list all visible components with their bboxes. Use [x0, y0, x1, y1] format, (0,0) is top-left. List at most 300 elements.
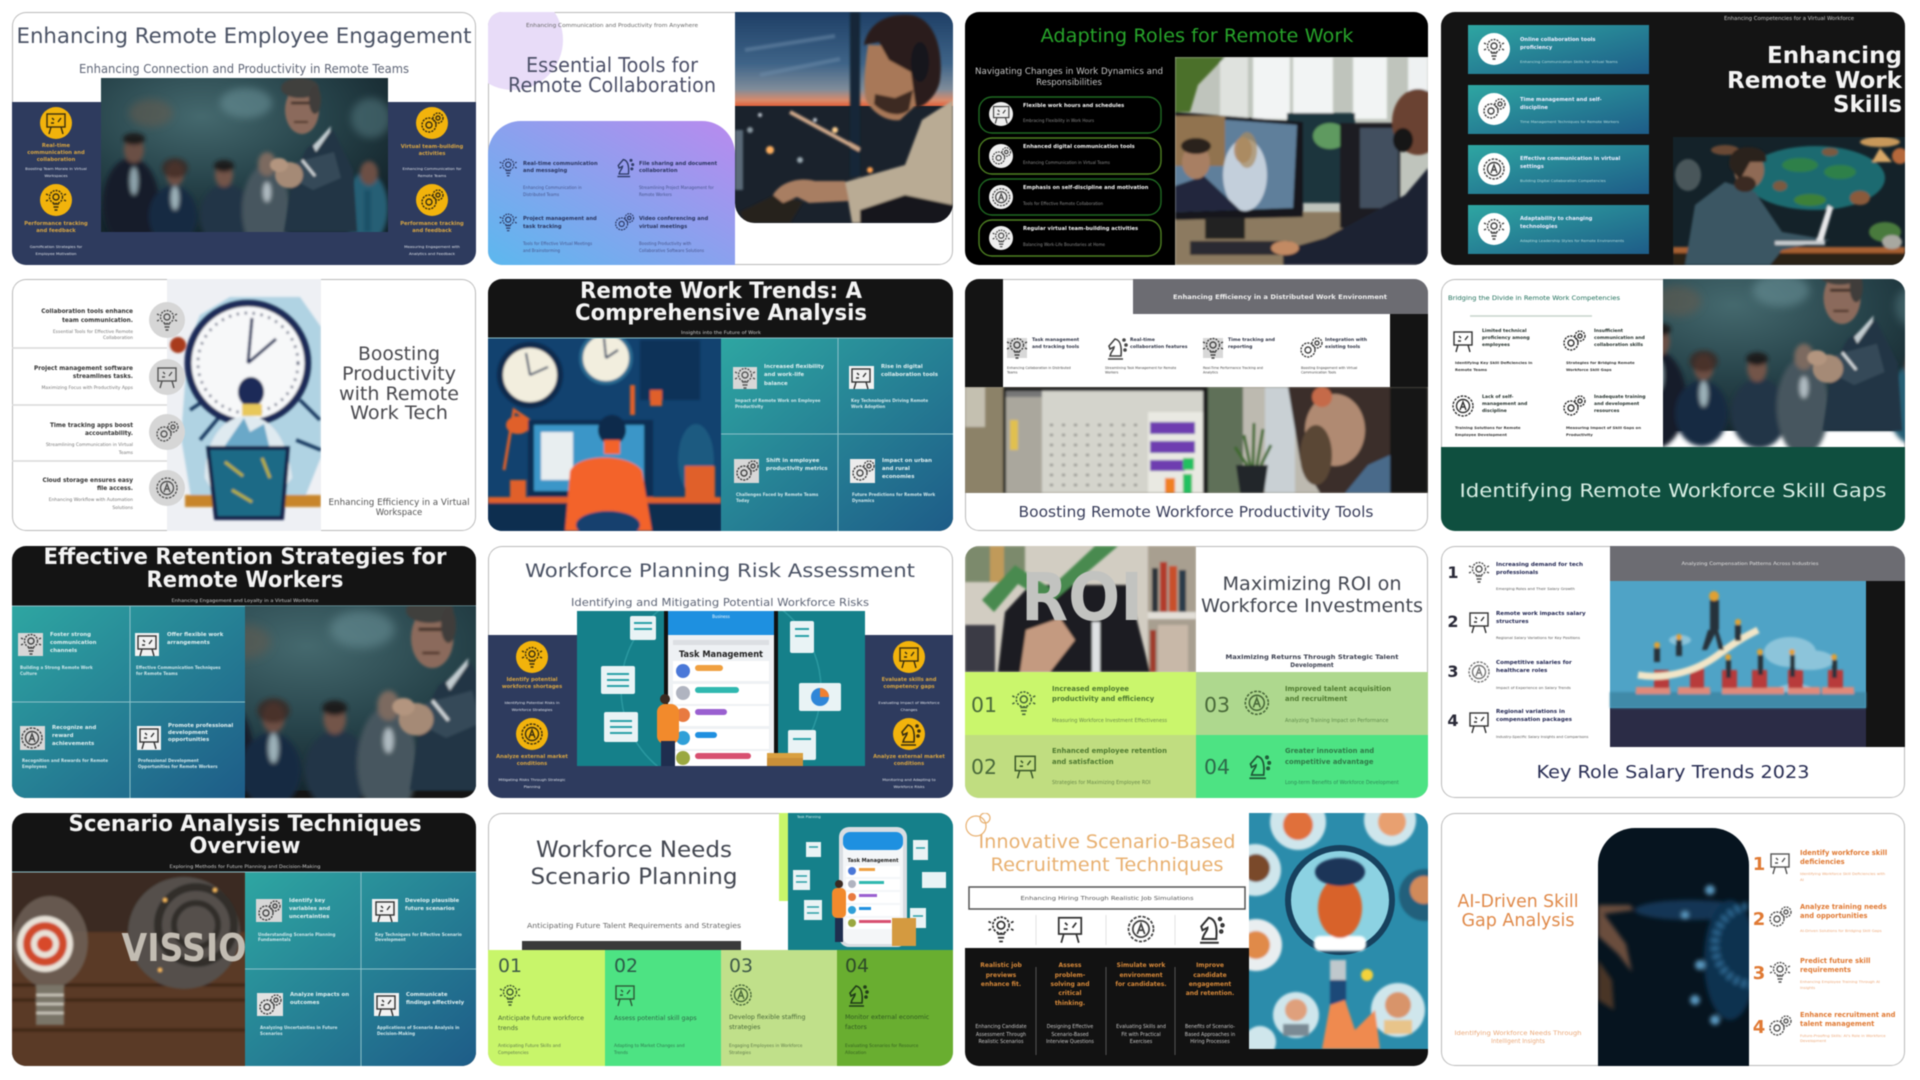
left column items: communication and — [27, 150, 85, 156]
feature row: Communication Tools — [1301, 370, 1336, 374]
column text: Scenario-Based — [1051, 1032, 1089, 1038]
feature row: reporting — [1228, 344, 1252, 350]
step 03: Develop flexible staffing — [729, 1014, 805, 1021]
photo: light bulb target and vision sign: VISSIO — [122, 926, 246, 970]
column text: previews — [986, 972, 1017, 979]
strategies quadrant panel: Professional Development — [138, 758, 199, 763]
cell 04: 04 — [1204, 755, 1230, 779]
skill gap items: management and — [1482, 401, 1527, 407]
title: Recruitment Techniques — [990, 854, 1224, 876]
cell 01: Increased employee — [1052, 685, 1129, 693]
salary item 2 — [1447, 611, 1586, 640]
decorative purple circle — [488, 12, 564, 90]
skill card 4: technologies — [1520, 224, 1557, 230]
techniques quadrant panel: Decision-Making — [377, 1031, 415, 1036]
trends quadrant panel: balance — [764, 381, 788, 387]
title: Remote Work Trends: A — [580, 279, 862, 304]
panel: Enhancing Remote Employee Engagement — [12, 12, 476, 265]
item: time tracking: Teams — [118, 450, 134, 456]
step 1 — [1753, 849, 1887, 882]
skill gap items: Productivity — [1566, 432, 1593, 437]
cell 03: Improved talent acquisition — [1285, 685, 1391, 693]
step 03: 03 — [729, 955, 753, 977]
salary item 4: Regional variations in — [1496, 709, 1565, 715]
gradient tools panel: Real-time communication — [523, 161, 598, 167]
skill gap items: Identifying Key Skill Deficiencies in — [1455, 360, 1533, 365]
left column items: Mitigating Risks Through Strategic — [499, 777, 565, 782]
image: phone with task list — [788, 813, 953, 950]
item: collaboration tools: Collaboration — [103, 335, 133, 341]
left column items: Workforce Strategies — [512, 707, 552, 712]
title: Work Tech — [350, 402, 448, 424]
right column items: Enhancing Communication for — [403, 166, 462, 171]
strategies quadrant panel: Employees — [22, 764, 47, 769]
subtitle: Enhancing Connection and Productivity in Remote Teams — [79, 62, 409, 76]
strategies quadrant panel: communication — [50, 640, 97, 646]
column text: for candidates. — [1115, 981, 1167, 988]
salary item 4: compensation packages — [1496, 717, 1573, 723]
gradient tools panel: File sharing and document — [639, 161, 718, 167]
trends quadrant panel: Work Adoption — [851, 404, 885, 409]
skill card 2: Time management and self- — [1520, 97, 1602, 103]
right column items — [400, 107, 464, 256]
step 02: 02 — [614, 955, 638, 977]
title: Remote Collaboration — [508, 73, 716, 97]
cell 01: 01 — [971, 693, 997, 717]
trends quadrant panel: Shift in employee — [766, 458, 820, 464]
step 3: Enhancing Employee Training Through AI — [1800, 979, 1880, 984]
column text: solving and — [1050, 981, 1090, 988]
column text: Realistic job — [980, 962, 1022, 969]
lime accent bar — [779, 813, 788, 901]
subtitle: Identifying and Mitigating Potential Workforce Risks — [571, 596, 869, 609]
panel: Maximizing ROI on Workforce Investments — [965, 546, 1428, 798]
skill gap items — [1453, 328, 1646, 437]
skill card 3: settings — [1520, 164, 1544, 170]
column text: environment — [1119, 972, 1163, 979]
skill gap items: Workforce Skill Gaps — [1566, 367, 1612, 372]
step 4: 4 — [1753, 1017, 1765, 1038]
trends quadrant panel: Key Technologies Driving Remote — [851, 398, 928, 403]
trends quadrant panel: collaboration tools — [881, 372, 938, 378]
panel: Remote Work Trends — [488, 279, 953, 539]
skill gap items: proficiency among — [1482, 335, 1530, 341]
title: Comprehensive Analysis — [575, 301, 867, 326]
title: Overview — [190, 834, 300, 859]
title: Gap Analysis — [1462, 911, 1574, 931]
column text: Interview Questions — [1046, 1039, 1094, 1045]
strategies quadrant panel: development — [168, 730, 208, 736]
right column items: Analytics and Feedback — [409, 251, 456, 256]
techniques quadrant panel: Analyze impacts on — [290, 992, 349, 998]
salary item 1 — [1447, 562, 1583, 591]
techniques quadrant panel: Analyzing Uncertainties in Future — [260, 1025, 338, 1030]
column text: Realistic Scenarios — [979, 1039, 1024, 1045]
subtitle box — [969, 887, 1245, 909]
column text: Improve — [1196, 962, 1224, 969]
skill gap items: employees — [1482, 342, 1510, 348]
skill gap items: Strategies for Bridging Remote — [1566, 360, 1635, 365]
cell 04: Long-term Benefits of Workforce Development — [1285, 780, 1399, 786]
step 02: Adapting to Market Changes and — [614, 1043, 685, 1049]
title band — [1441, 447, 1905, 531]
panel: Boosting Productivity with Remote Work Tech — [12, 279, 476, 531]
techniques quadrant panel: outcomes — [290, 1000, 320, 1006]
subtitle: Identifying Workforce Needs Through — [1454, 1031, 1582, 1037]
trends quadrant panel: economies — [882, 474, 914, 480]
salary item 4: 4 — [1447, 711, 1459, 730]
item: collaboration tools — [41, 302, 185, 341]
cell 02 — [965, 735, 1196, 798]
strategies quadrant panel: achievements — [52, 741, 94, 747]
right column items: Changes — [901, 707, 917, 712]
decorative circles — [966, 813, 990, 836]
feature row: Workers — [1105, 370, 1119, 374]
item: cloud storage: Solutions — [112, 505, 134, 511]
panel: Workforce Planning Risk Assessment — [488, 546, 953, 798]
item dividers — [12, 348, 167, 461]
panel: Effective Retention Strategies — [12, 545, 544, 819]
subtitle: Development — [1290, 663, 1334, 669]
step 3: Predict future skill — [1800, 957, 1870, 965]
column text — [975, 962, 1235, 1055]
feature row: Real-Time Performance Tracking and — [1203, 366, 1263, 370]
item: cloud storage — [42, 470, 185, 511]
skill gap items: collaboration skills — [1594, 342, 1643, 348]
left column items: Employee Motivation — [36, 251, 77, 256]
title band: Identifying Remote Workforce Skill Gaps — [1460, 480, 1886, 502]
step 2: 2 — [1753, 909, 1765, 930]
techniques quadrant panel: future scenarios — [405, 906, 455, 912]
item: collaboration tools: team communication. — [62, 318, 133, 324]
column text: Enhancing Candidate — [975, 1024, 1027, 1030]
item: time tracking — [46, 414, 185, 456]
clock illustration — [167, 279, 321, 531]
skill gap items: Remote Teams — [1455, 367, 1488, 372]
salary item 1: 1 — [1447, 563, 1459, 582]
item: project management: Project management software — [34, 366, 133, 372]
title: Scenario Analysis Techniques — [68, 812, 422, 837]
strategies quadrant panel: for Remote Teams — [136, 671, 178, 676]
salary item 2: Remote work impacts salary — [1496, 611, 1586, 617]
right column items: Performance tracking — [400, 221, 464, 227]
photo: team with pointing man — [1623, 263, 1920, 456]
photo: man at laptop before world map — [1673, 137, 1908, 265]
salary item 3: 3 — [1447, 662, 1459, 681]
techniques quadrant panel: findings effectively — [406, 1000, 465, 1006]
strategies quadrant panel: Culture — [20, 671, 37, 676]
left column items: and feedback — [36, 228, 76, 234]
title: Workforce Planning Risk Assessment — [525, 561, 915, 582]
trends quadrant panel: Impact of Remote Work on Employee — [735, 398, 821, 403]
feature row: Integration with — [1325, 337, 1367, 343]
trends quadrant panel: Dynamics — [852, 498, 875, 503]
column text: Based Approaches in — [1185, 1032, 1235, 1038]
left column items: workforce shortages — [502, 684, 562, 690]
step 3 — [1753, 957, 1880, 990]
gradient tools panel — [488, 121, 735, 265]
cell 01: productivity and efficiency — [1052, 695, 1155, 703]
image: phone with task list: Task Planning — [796, 815, 821, 819]
salary item 2: 2 — [1447, 612, 1459, 631]
photo: light bulb target and vision sign — [12, 872, 246, 1066]
feature row: existing tools — [1325, 344, 1360, 350]
step 01: trends — [498, 1025, 518, 1032]
strategies quadrant panel: opportunities — [168, 737, 209, 743]
step 4: Future-Proofing Skills: AI's Role in Workforce — [1800, 1033, 1886, 1038]
skill card 1: proficiency — [1520, 45, 1553, 51]
column text: Simulate work — [1117, 962, 1166, 969]
skill gap items: Insufficient — [1594, 328, 1624, 334]
step 03: strategies — [729, 1024, 760, 1031]
panel: Boosting Remote Workforce Productivity Tools — [965, 279, 1428, 531]
right column items: conditions — [894, 761, 924, 767]
techniques quadrant panel: Understanding Scenario Planning — [258, 932, 335, 937]
item: collaboration tools: Collaboration tools enhance — [41, 309, 133, 315]
column text: thinking. — [1055, 1000, 1085, 1007]
column text: candidate — [1193, 972, 1227, 979]
column text: Exercises — [1130, 1039, 1153, 1045]
photo: spreadsheet on monitor and plant — [965, 387, 1428, 493]
step 04: Evaluating Scenarios for Resource — [845, 1043, 919, 1049]
trends quadrant panel: Today — [736, 498, 750, 503]
techniques quadrant panel: Develop plausible — [405, 898, 460, 904]
left column items: Planning — [524, 784, 541, 789]
list item 4: Regular virtual team-building activities — [1023, 226, 1138, 232]
step 3: Insights — [1800, 985, 1815, 990]
step 2: Analyze training needs — [1800, 903, 1887, 911]
list item 2: Enhanced digital communication tools — [1023, 144, 1135, 150]
right column items: Monitoring and Adapting to — [882, 777, 936, 782]
strategies quadrant panel: Offer flexible work — [167, 632, 224, 638]
skill card 1: Enhancing Communication Skills for Virtual Teams — [1520, 59, 1618, 64]
strategies quadrant panel: Opportunities for Remote Workers — [138, 764, 218, 769]
strategies quadrant panel: arrangements — [167, 640, 210, 646]
illustration: team climbing steps — [1610, 581, 1905, 747]
right column items: activities — [419, 151, 445, 157]
list item 1: Embracing Flexibility in Work Hours — [1023, 118, 1094, 123]
salary item 3: healthcare roles — [1496, 668, 1548, 674]
gradient tools panel: Remote Workers — [639, 192, 672, 197]
left column items: Identifying Potential Risks in — [504, 700, 560, 705]
skill gap items: resources — [1594, 408, 1620, 414]
step 03: Strategies — [729, 1050, 752, 1056]
title: Productivity — [342, 363, 456, 385]
dark bar — [522, 941, 741, 950]
techniques quadrant panel: Identify key — [289, 898, 326, 904]
step 03: Engaging Employees in Workforce — [729, 1043, 803, 1049]
step 1: Identify workforce skill — [1800, 849, 1887, 857]
skill gap items: Lack of self- — [1482, 394, 1514, 400]
item: collaboration tools: Essential Tools for Effective Remote — [53, 329, 133, 335]
item: cloud storage: Cloud storage ensures easy — [42, 478, 133, 484]
panel: Identifying Remote Workforce Skill Gaps — [1441, 263, 1920, 531]
subtitle: Workspace — [376, 508, 422, 518]
panel: Scenario Analysis Techniques Overview — [12, 812, 476, 1066]
right column items: Evaluate skills and — [882, 677, 937, 683]
strategies quadrant panel: Foster strong — [50, 632, 91, 638]
list item 1 — [979, 97, 1161, 133]
salary item 3: Impact of Experience on Salary Trends — [1496, 685, 1571, 690]
left column items: collaboration — [37, 157, 76, 163]
strategies quadrant panel: channels — [50, 648, 77, 654]
strategies quadrant panel: Building a Strong Remote Work — [20, 665, 93, 670]
photo: hand touching digital interface — [1598, 828, 1795, 1066]
cell 04: Greater innovation and — [1285, 747, 1374, 755]
column text: engagement — [1189, 981, 1231, 988]
subtitle: Enhancing Efficiency in a Virtual — [328, 498, 470, 508]
navy band — [488, 635, 953, 798]
panel: Innovative Scenario-Based Recruitment Techniques — [965, 794, 1451, 1066]
cell 03: 03 — [1204, 693, 1230, 717]
gradient tools panel: and Brainstorming — [523, 248, 560, 253]
strategies quadrant panel: Effective Communication Techniques — [136, 665, 221, 670]
cell 02: and satisfaction — [1052, 758, 1114, 766]
feature row: Streamlining Task Management for Remote — [1105, 366, 1176, 370]
skill gap items: and development — [1594, 401, 1640, 407]
title: Remote Workers — [146, 568, 344, 593]
salary item 4: Industry-Specific Salary Insights and Comparisons — [1496, 735, 1588, 739]
left column items: conditions — [517, 761, 547, 767]
right column items: Analyze external market — [873, 754, 945, 760]
skill card 4 — [1468, 205, 1649, 254]
title: AI-Driven Skill — [1458, 892, 1578, 912]
step 4: Development — [1800, 1038, 1827, 1043]
step 04 — [837, 950, 953, 1066]
cell 02: 02 — [971, 755, 997, 779]
column text: and retention. — [1186, 990, 1234, 997]
list item 3: Tools for Effective Remote Collaboration — [1022, 201, 1103, 206]
list item 4 — [979, 220, 1161, 256]
left column items: Boosting Team Morale in Virtual — [25, 166, 87, 171]
subtitle: Enhancing Engagement and Loyalty in a Virtual Workforce — [172, 598, 319, 604]
skill gap items: Training Solutions for Remote — [1455, 425, 1521, 430]
gradient tools panel: Collaborative Software Solutions — [639, 248, 704, 253]
left column items: Gamification Strategies for — [30, 244, 83, 249]
techniques quadrant panel: Fundamentals — [258, 937, 291, 942]
feature row: Analytics — [1203, 370, 1218, 374]
column text: Evaluating Skills and — [1116, 1024, 1166, 1030]
skill card 3 — [1468, 145, 1649, 194]
trends quadrant panel: Challenges Faced by Remote Teams — [736, 492, 819, 497]
gradient tools panel: and messaging — [523, 168, 567, 174]
column text: Assessment Through — [976, 1032, 1026, 1038]
step 04: factors — [845, 1024, 867, 1031]
subtitle: Navigating Changes in Work Dynamics and — [975, 67, 1163, 77]
step 3: requirements — [1800, 966, 1851, 974]
title: Essential Tools for — [526, 53, 699, 77]
cell 03: and recruitment — [1285, 695, 1348, 703]
left column items — [496, 641, 568, 789]
panel: Enhancing Remote Work Skills — [1441, 12, 1908, 265]
skill gap items: Employee Development — [1455, 432, 1507, 437]
photo: man with headset at night — [735, 12, 953, 226]
skill card 2: Time Management Techniques for Remote Workers — [1519, 119, 1619, 124]
item: project management: Maximizing Focus with Productivity Apps — [42, 385, 134, 391]
list item 1: Flexible work hours and schedules — [1023, 103, 1124, 109]
left column items: Real-time — [42, 143, 71, 149]
title: Enhancing — [1767, 43, 1902, 69]
trends quadrant panel: and rural — [882, 466, 910, 472]
techniques quadrant panel: Development — [375, 937, 406, 942]
panel: Adapting Roles for Remote Work — [965, 12, 1444, 265]
eyebrow: Bridging the Divide in Remote Work Competencies — [1448, 294, 1621, 302]
techniques quadrant panel: Key Techniques for Effective Scenario — [375, 932, 462, 937]
techniques quadrant panel: Communicate — [406, 992, 448, 998]
step 01: 01 — [498, 955, 522, 977]
step 3: 3 — [1753, 963, 1765, 984]
panel: Workforce Needs Scenario Planning — [488, 813, 953, 1066]
gradient tools panel: Streamlining Project Management for — [639, 185, 714, 190]
skill card 3: Effective communication in virtual — [1520, 156, 1620, 162]
trends quadrant panel: Rise in digital — [881, 364, 923, 370]
skill card 2: discipline — [1520, 105, 1548, 111]
skill gap items: Limited technical — [1482, 328, 1527, 334]
photo: team with pointing man — [100, 77, 389, 232]
item: time tracking: Streamlining Communication in Virtual — [46, 442, 133, 448]
item: project management — [34, 359, 185, 395]
list item 2 — [979, 138, 1161, 174]
step 01: Anticipate future workforce — [498, 1015, 584, 1022]
feature row: and tracking tools — [1032, 344, 1079, 350]
feature row: Real-time — [1130, 337, 1155, 343]
left column items: Performance tracking — [24, 221, 88, 227]
feature row: Time tracking and — [1228, 337, 1275, 343]
title: Skills — [1833, 92, 1902, 118]
skill card 4: Adapting Leadership Styles for Remote Environments — [1520, 238, 1624, 243]
title: Maximizing ROI on — [1222, 573, 1402, 595]
navy band — [12, 102, 476, 265]
techniques quadrant panel: uncertainties — [289, 914, 329, 920]
step 2 — [1753, 903, 1887, 933]
techniques quadrant panel — [12, 872, 476, 1066]
salary item 2: structures — [1496, 619, 1529, 625]
gradient tools panel: Tools for Effective Virtual Meetings — [522, 241, 592, 246]
trends quadrant panel: Increased flexibility — [764, 364, 825, 370]
right column items: Remote Teams — [418, 173, 446, 178]
title: Workforce Needs — [536, 838, 732, 863]
subtitle box: Enhancing Hiring Through Realistic Job Simulations — [1020, 896, 1194, 902]
step 1: 1 — [1753, 854, 1765, 875]
panel: Essential Tools for Remote Collaboration — [463, 0, 953, 265]
strategies quadrant panel: Recognize and — [52, 725, 96, 731]
step 2: and opportunities — [1800, 912, 1867, 920]
title: Enhancing Remote Employee Engagement — [16, 24, 472, 48]
subtitle: Maximizing Returns Through Strategic Talent — [1226, 655, 1399, 661]
gradient tools panel: collaboration — [639, 168, 678, 174]
step 1: AI — [1800, 877, 1804, 882]
cell 01 — [965, 672, 1196, 735]
banner — [1133, 279, 1428, 314]
salary item 3 — [1447, 660, 1572, 690]
step 02: Assess potential skill gaps — [614, 1015, 697, 1022]
cell 02: Strategies for Maximizing Employee ROI — [1052, 780, 1151, 786]
step 01 — [488, 950, 605, 1066]
panel: Key Role Salary Trends 2023 — [1441, 546, 1905, 798]
subtitle: Responsibilities — [1036, 78, 1102, 88]
title: Boosting Remote Workforce Productivity Tools — [1018, 503, 1374, 521]
column text: Designing Effective — [1047, 1024, 1093, 1030]
step 2: AI-Driven Solutions for Bridging Skill Gaps — [1800, 928, 1882, 933]
right column items: competency gaps — [883, 684, 935, 690]
left column items — [24, 107, 88, 256]
step 4 — [1753, 1011, 1896, 1043]
left column items: Analyze external market — [496, 754, 568, 760]
left column items: Workspaces — [44, 173, 68, 178]
photo: team with pointing man — [181, 598, 544, 819]
item: time tracking: Time tracking apps boost — [50, 423, 133, 429]
right column items: Measuring Engagement with — [404, 244, 460, 249]
